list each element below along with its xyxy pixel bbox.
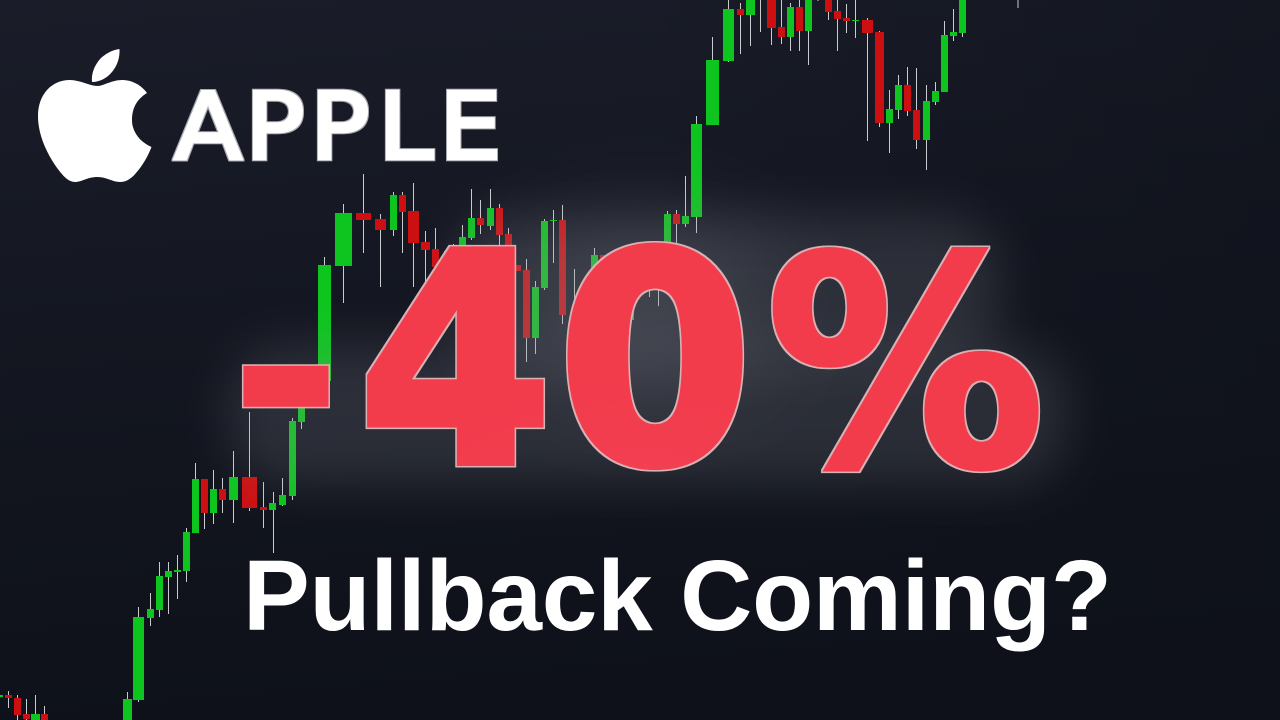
- headline figure: -: [228, 201, 344, 538]
- soft glow behind headline: [228, 215, 1068, 485]
- logo: apple: [38, 49, 152, 182]
- subtitle: Pullback Coming?: [243, 540, 1112, 652]
- candlestick chart: [0, 0, 1018, 720]
- headline figure: %: [767, 196, 1045, 533]
- headline figure: 40: [359, 193, 752, 530]
- brand name: APPLE: [174, 74, 501, 181]
